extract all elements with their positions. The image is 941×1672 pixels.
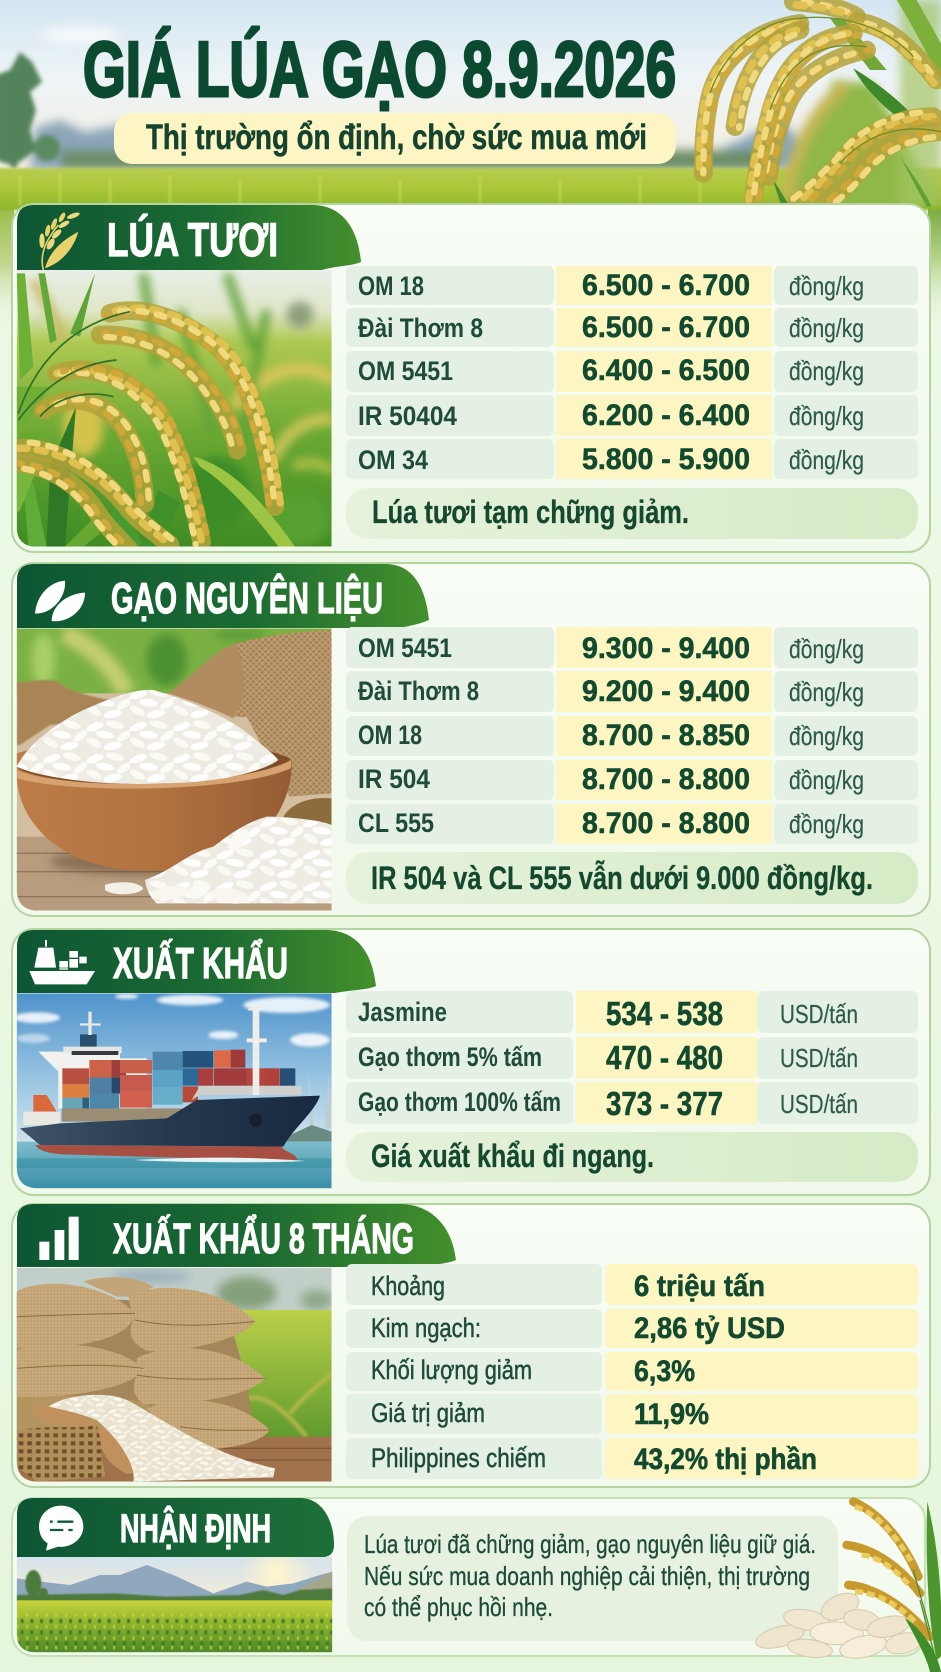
row: OM 18 (346, 266, 918, 305)
note: gạo nguyên liệu (346, 852, 918, 904)
note: lúa tươi: Lúa tươi tạm chững giảm. (372, 494, 689, 530)
row: Gạo thơm 100% tấm: 373 - 377 (606, 1085, 723, 1122)
row: Đài Thơm 8: đồng/kg (789, 677, 864, 707)
row: CL 555: đồng/kg (789, 809, 864, 839)
row: Gạo thơm 100% tấm: USD/tấn (780, 1089, 858, 1119)
header: gạo nguyên liệu (17, 564, 429, 628)
hero background: sky, mountains and rice field (0, 0, 941, 210)
icon: speech bubble (39, 1506, 83, 1551)
rice grains and stalks (753, 1502, 941, 1672)
subtitle pill: Thị trường ổn định, chờ sức mua mới (146, 118, 647, 157)
text block: nhận định: Nếu sức mua doanh nghiệp cải thiện, thị trường (364, 1561, 810, 1591)
row: IR 50404: 6.200 - 6.400 (582, 399, 750, 432)
row: OM 18 (346, 716, 918, 756)
header: xuất khẩu (17, 930, 376, 993)
header: lúa tươi (17, 205, 361, 270)
panel: nhận định (12, 1498, 941, 1672)
photo: container ship (13, 993, 332, 1188)
panel: gạo nguyên liệu (12, 563, 930, 916)
text block: nhận định (347, 1516, 838, 1641)
row: OM 18: đồng/kg (789, 721, 864, 751)
row: Kim ngạch: Kim ngạch: (371, 1313, 481, 1343)
row: Jasmine: USD/tấn (780, 999, 858, 1029)
row: Philippines chiếm: 43,2% thị phần (634, 1443, 817, 1476)
icon: rice grains (35, 581, 85, 621)
note: xuất khẩu: Giá xuất khẩu đi ngang. (371, 1138, 654, 1174)
row: Đài Thơm 8 (346, 308, 918, 347)
icon: cargo ship (29, 940, 95, 984)
row: Jasmine (346, 991, 918, 1033)
row: OM 5451 (346, 351, 918, 392)
row: OM 5451: đồng/kg (789, 634, 864, 664)
header: gạo nguyên liệu: GẠO NGUYÊN LIỆU (111, 573, 383, 623)
header: lúa tươi: LÚA TƯƠI (107, 213, 278, 266)
row: OM 18: đồng/kg (789, 271, 864, 301)
text block: nhận định: có thể phục hồi nhẹ. (364, 1592, 553, 1622)
text block: nhận định: Lúa tươi đã chững giảm, gạo nguyên liệu giữ giá. (364, 1529, 816, 1559)
header: nhận định: NHẬN ĐỊNH (120, 1505, 271, 1551)
row: Đài Thơm 8: 6.500 - 6.700 (582, 311, 750, 344)
row: IR 504: đồng/kg (789, 765, 864, 795)
row: Đài Thơm 8: Đài Thơm 8 (358, 313, 483, 343)
row: Gạo thơm 5% tấm: Gạo thơm 5% tấm (358, 1042, 542, 1072)
row: OM 34: 5.800 - 5.900 (582, 443, 750, 476)
row: Gạo thơm 100% tấm: Gạo thơm 100% tấm (358, 1087, 561, 1117)
row: IR 50404: đồng/kg (789, 401, 864, 431)
row: IR 504: 8.700 - 8.800 (582, 763, 750, 796)
row: Gạo thơm 5% tấm: 470 - 480 (606, 1039, 723, 1076)
panel: xuất khẩu (12, 929, 930, 1195)
row: Jasmine: 534 - 538 (606, 995, 723, 1032)
row: OM 34: đồng/kg (789, 445, 864, 475)
row: OM 5451 (346, 627, 918, 668)
row: CL 555: CL 555 (358, 808, 434, 838)
photo: rice panicles (14, 270, 333, 552)
row: OM 5451: đồng/kg (789, 356, 864, 386)
row: CL 555: 8.700 - 8.800 (582, 807, 750, 840)
row: Giá trị giảm (346, 1394, 918, 1434)
panel: lúa tươi (12, 204, 930, 552)
header: xuất khẩu 8 tháng (17, 1204, 456, 1267)
photo: rice sacks (17, 1268, 333, 1482)
row: OM 18: 6.500 - 6.700 (582, 269, 750, 302)
right edge faded rice leaves (928, 205, 941, 325)
row: Khối lượng giảm (346, 1352, 918, 1391)
row: OM 5451: 9.300 - 9.400 (582, 632, 750, 665)
row: Kim ngạch: 2,86 tỷ USD (634, 1312, 785, 1345)
row: IR 50404: IR 50404 (358, 401, 457, 431)
note: xuất khẩu (346, 1132, 918, 1182)
title: GIÁ LÚA GẠO 8.9.2026 (83, 25, 676, 113)
row: OM 5451: OM 5451 (358, 356, 453, 386)
row: Khối lượng giảm: 6,3% (634, 1355, 695, 1388)
row: Khoảng: 6 triệu tấn (634, 1270, 765, 1303)
icon: bar chart (39, 1217, 79, 1260)
row: Philippines chiếm (346, 1438, 918, 1479)
header: xuất khẩu: XUẤT KHẨU (113, 937, 288, 988)
row: IR 504 (346, 760, 918, 800)
left edge faded rice field (0, 205, 14, 325)
photo: field landscape (16, 1556, 332, 1652)
row: OM 18: OM 18 (358, 720, 422, 750)
header: xuất khẩu 8 tháng: XUẤT KHẨU 8 THÁNG (113, 1214, 414, 1263)
row: Gạo thơm 5% tấm (346, 1037, 918, 1079)
row: Kim ngạch (346, 1309, 918, 1348)
row: Giá trị giảm: 11,9% (634, 1398, 709, 1431)
subtitle pill (114, 113, 676, 164)
row: IR 50404 (346, 395, 918, 436)
row: Khoảng: Khoảng (371, 1271, 445, 1301)
row: Đài Thơm 8 (346, 671, 918, 712)
row: OM 34: OM 34 (358, 445, 428, 475)
row: CL 555 (346, 804, 918, 844)
row: Gạo thơm 5% tấm: USD/tấn (780, 1043, 858, 1073)
row: IR 504: IR 504 (358, 764, 430, 794)
row: OM 34 (346, 439, 918, 479)
row: OM 18: OM 18 (358, 271, 424, 301)
row: Philippines chiếm: Philippines chiếm (371, 1443, 546, 1473)
row: OM 5451: OM 5451 (358, 633, 452, 663)
row: Giá trị giảm: Giá trị giảm (371, 1398, 485, 1428)
row: OM 5451: 6.400 - 6.500 (582, 354, 750, 387)
row: Gạo thơm 100% tấm (346, 1082, 918, 1124)
row: Khối lượng giảm: Khối lượng giảm (371, 1355, 532, 1385)
rice stalks, top right (699, 0, 941, 230)
note: lúa tươi (346, 488, 918, 539)
row: Đài Thơm 8: đồng/kg (789, 313, 864, 343)
photo: bowl of rice (17, 628, 332, 912)
panel: xuất khẩu 8 tháng (12, 1204, 930, 1487)
row: Đài Thơm 8: Đài Thơm 8 (358, 676, 479, 706)
header: nhận định (17, 1498, 334, 1557)
row: Đài Thơm 8: 9.200 - 9.400 (582, 675, 750, 708)
row: OM 18: 8.700 - 8.850 (582, 719, 750, 752)
row: Khoảng (346, 1264, 918, 1305)
row: Jasmine: Jasmine (358, 997, 447, 1027)
icon: rice sprig (39, 211, 80, 270)
